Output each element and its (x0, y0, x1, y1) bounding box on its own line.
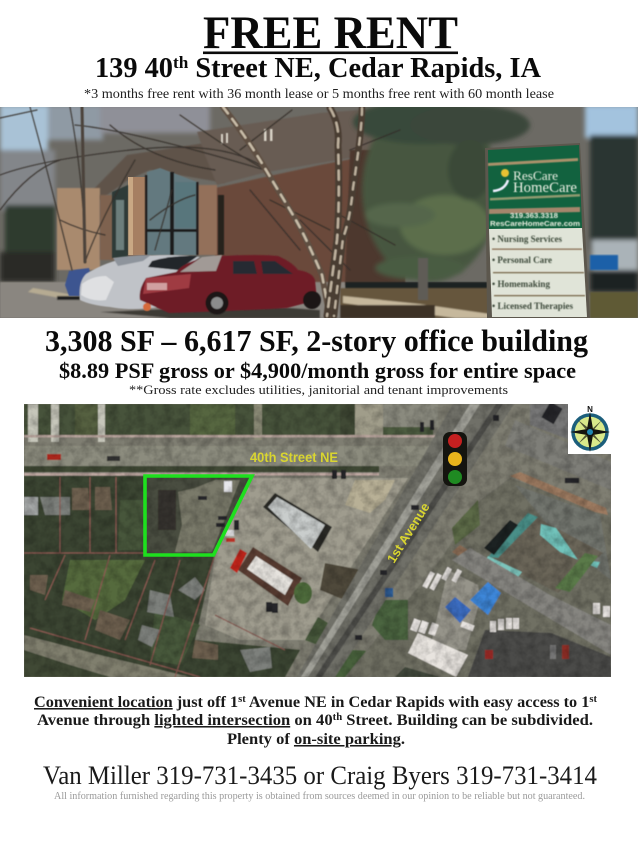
parking lots (205, 478, 408, 640)
ground (0, 258, 638, 318)
40th Street (24, 446, 464, 466)
left pines (5, 205, 55, 253)
top blocks (24, 404, 340, 436)
location description: Street. Building can be subdivided. (342, 712, 593, 729)
location description (34, 694, 598, 748)
sign: ResCareHomeCare.com (490, 219, 580, 228)
evergreen tree (353, 98, 530, 282)
silver car (80, 255, 200, 309)
icon: compass: N (587, 405, 593, 414)
residential lots (24, 476, 300, 677)
blue building (470, 582, 501, 615)
sign: ResCare (513, 168, 558, 183)
lot east of avenue (372, 600, 408, 640)
sign (485, 143, 590, 318)
blue truck (590, 255, 618, 270)
location description: th (333, 712, 343, 723)
teal building (496, 519, 602, 592)
brick wall (215, 159, 350, 283)
house roofs (24, 497, 272, 672)
contact line: Van Miller 319-731-3435 or Craig Byers 319-731-3414 (43, 761, 597, 790)
sign: 319.363.3318 (510, 211, 558, 220)
photo: building and sign (0, 98, 638, 318)
pricing line: $8.89 PSF gross or $4,900/month gross for entire space (59, 358, 576, 383)
tan walls (57, 188, 100, 270)
icon: traffic light (443, 432, 467, 486)
title: FREE RENT (203, 7, 458, 59)
windows (112, 168, 224, 258)
dark cars (198, 402, 579, 640)
sign: HomeCare (513, 180, 577, 196)
restaurant (238, 547, 302, 606)
vans (410, 567, 610, 636)
sign: • Licensed Therapies (492, 301, 573, 311)
location description: Avenue through lighted intersection on 40 (37, 712, 330, 729)
birch trunks and branches (0, 107, 400, 318)
location description: st (589, 694, 598, 705)
cars (65, 255, 321, 314)
location description: Convenient location just off 1 (34, 694, 235, 711)
subject building (145, 476, 252, 555)
sign: • Nursing Services (492, 234, 562, 244)
white building (408, 633, 468, 677)
sign: • Homemaking (492, 279, 551, 289)
1st Avenue (297, 404, 514, 677)
icon: compass (568, 404, 611, 454)
property lot lines (24, 477, 285, 677)
address heading: th (173, 53, 189, 72)
free rent terms: *3 months free rent with 36 month lease or 5 months free rent with 60 month lease (84, 87, 554, 102)
street label: 1st Avenue: 1st Avenue (384, 500, 433, 566)
site outline (145, 476, 252, 555)
disclaimer: All information furnished regarding this property is obtained from sources deemed in our opinion to be reliable but not guaranteed. (54, 791, 585, 802)
red car (140, 255, 317, 313)
aerial map (24, 402, 611, 677)
sky (0, 105, 48, 150)
strip building (263, 493, 332, 552)
location description: st (238, 694, 246, 705)
sign: • Personal Care (492, 255, 552, 265)
right dark tree (590, 135, 638, 250)
red truck (230, 549, 247, 573)
gross rate note: **Gross rate excludes utilities, janitorial and tenant improvements (129, 382, 508, 397)
main roof (196, 110, 372, 184)
address heading: Street NE, Cedar Rapids, IA (188, 53, 542, 84)
address heading: 139 40 (95, 53, 172, 84)
location description: Plenty of on-site parking . (227, 731, 405, 748)
sidewalks (24, 435, 464, 438)
left roof (95, 144, 216, 196)
roof vents (221, 129, 272, 144)
building size heading: 3,308 SF – 6,617 SF, 2-story office building (45, 323, 588, 358)
street label: 40th Street NE: 40th Street NE (250, 450, 338, 465)
location description: Avenue NE in Cedar Rapids with easy access to 1 (246, 694, 589, 711)
block east of avenue (345, 478, 611, 677)
